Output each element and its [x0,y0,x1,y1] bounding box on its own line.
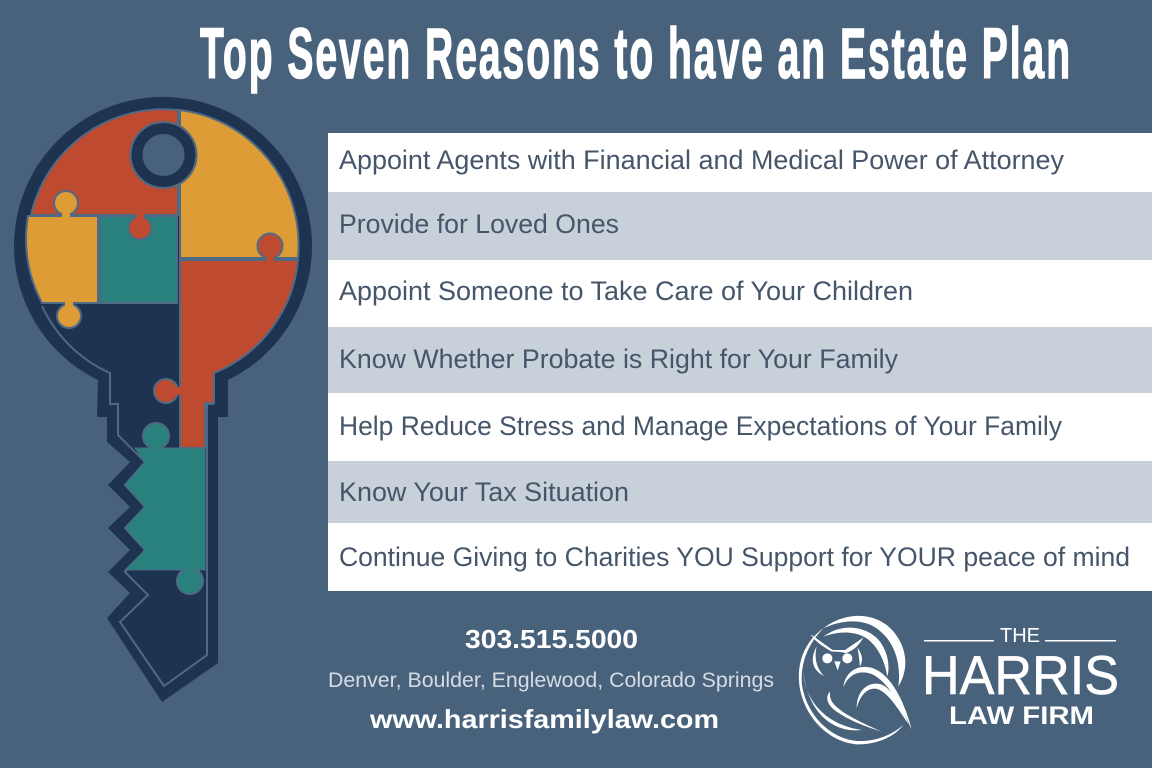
icon: puzzle key [14,97,312,702]
office locations: Denver, Boulder, Englewood, Colorado Springs [328,669,774,692]
puzzle tab: teal bottom [177,566,203,594]
row 7 [328,523,1152,591]
puzzle piece: red top left [31,109,178,215]
website: www.harrisfamilylaw.com [369,704,719,734]
row 6 [328,461,1152,523]
row 5 [328,393,1152,461]
puzzle tab: red in yellow [258,234,282,262]
logo word: harris: HARRIS [922,644,1119,706]
phone number: 303.515.5000 [465,624,638,654]
row 4 [328,327,1152,393]
key outer silhouette [14,97,312,702]
puzzle tab: teal top [143,423,169,450]
key inner outline [42,306,213,686]
row 6: Know Your Tax Situation [339,477,629,507]
row 1: Appoint Agents with Financial and Medical Power of Attorney [339,145,1064,175]
row 1 [328,133,1152,192]
title: Top Seven Reasons to have an Estate Plan [200,15,1070,94]
logo rule right [1045,640,1116,642]
icon: owl [799,616,912,744]
puzzle tab: yellow top [54,191,78,219]
row 3: Appoint Someone to Take Care of Your Children [339,276,913,306]
row 7: Continue Giving to Charities YOU Support for YOUR peace of mind [339,542,1130,572]
panel: reasons list [328,133,1152,591]
logo rule left [924,640,994,642]
puzzle piece: teal teeth [125,448,205,570]
puzzle piece: yellow top right [180,110,299,258]
key hole [130,122,196,188]
puzzle piece: red right [180,260,298,448]
puzzle tab: red in teal [128,212,152,240]
row 2 [328,192,1152,260]
logo: The Harris Law Firm [799,616,1119,744]
row 5: Help Reduce Stress and Manage Expectations of Your Family [339,411,1062,441]
puzzle tab: red in navy [154,379,183,403]
puzzle piece: teal upper [100,216,177,303]
row 4: Know Whether Probate is Right for Your Family [339,344,898,374]
logo word: the: THE [1000,625,1040,647]
row 3 [328,260,1152,327]
logo word: law firm: LAW FIRM [949,702,1094,730]
puzzle piece: yellow left [26,216,98,303]
row 2: Provide for Loved Ones [339,209,619,239]
puzzle tab: yellow bottom [57,300,81,328]
